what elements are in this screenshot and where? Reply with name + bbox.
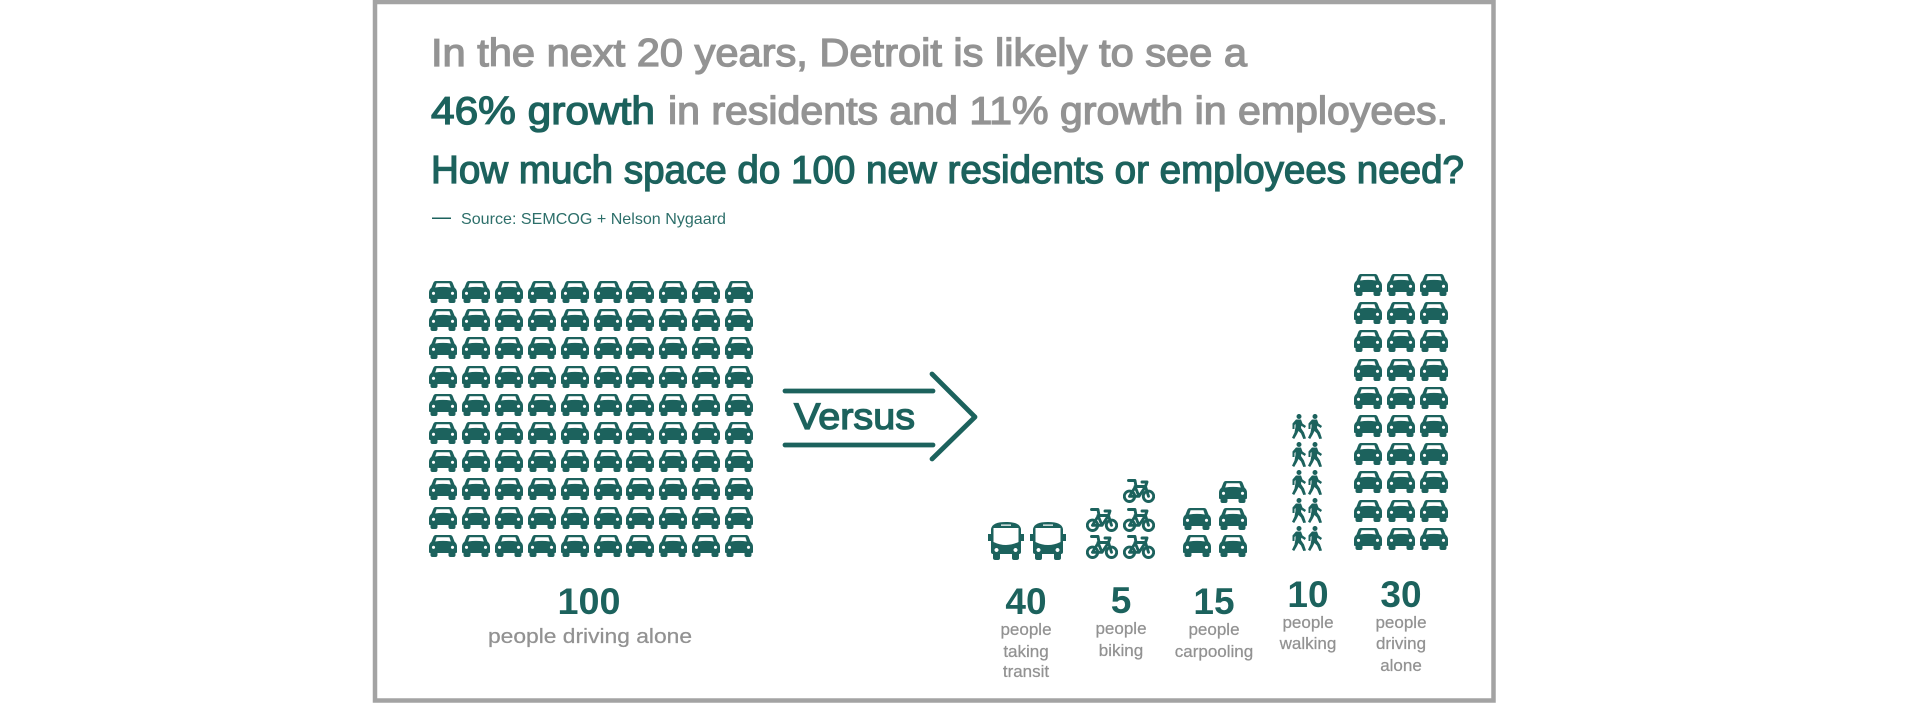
- label: 5 people biking: [1095, 580, 1147, 660]
- source note: Source: SEMCOG + Nelson Nygaard: [461, 211, 726, 228]
- label: 10 people walking: walking: [1279, 634, 1336, 653]
- label: 10 people walking: [1279, 574, 1336, 653]
- icons: solo driver cars: [1354, 274, 1448, 550]
- label: 30 people driving alone: driving: [1376, 634, 1426, 653]
- label: 5 people biking: 5: [1111, 580, 1131, 621]
- label: 15 people carpooling: 15: [1193, 581, 1235, 622]
- label: 5 people biking: people: [1095, 619, 1147, 638]
- label: 100 people driving alone: 100: [558, 581, 620, 622]
- outer frame: [375, 2, 1494, 700]
- icons: bikes: [1087, 480, 1154, 558]
- label: 30 people driving alone: alone: [1380, 656, 1422, 675]
- label: 5 people biking: biking: [1099, 641, 1143, 660]
- label: 15 people carpooling: carpooling: [1175, 642, 1253, 661]
- label: 40 people taking transit: 40: [1005, 581, 1047, 622]
- icons: walkers: [1292, 414, 1322, 551]
- label: 40 people taking transit: taking: [1003, 642, 1049, 661]
- icons: buses: [988, 522, 1066, 560]
- title line 3 question: How much space do 100 new residents or employees need?: [431, 149, 1464, 192]
- label: 15 people carpooling: people: [1188, 620, 1240, 639]
- label: 15 people carpooling: [1175, 581, 1253, 661]
- label: 40 people taking transit: people: [1000, 620, 1052, 639]
- label: 10 people walking: people: [1282, 613, 1334, 632]
- label: 30 people driving alone: [1375, 574, 1427, 675]
- label: 100 people driving alone: people driving alone: [488, 626, 692, 648]
- title line 2 highlight: 46% growth: [431, 90, 655, 133]
- label: 10 people walking: 10: [1287, 574, 1329, 615]
- label: 30 people driving alone: 30: [1380, 574, 1422, 615]
- title line 2 remainder: in residents and 11% growth in employees.: [668, 90, 1448, 133]
- car grid: 100 people driving alone: [429, 281, 753, 557]
- label: 40 people taking transit: [1000, 581, 1052, 681]
- label: 30 people driving alone: people: [1375, 613, 1427, 632]
- icons: carpool cars: [1183, 481, 1247, 557]
- label: 40 people taking transit: transit: [1003, 662, 1049, 681]
- arrow: Versus: Versus: [794, 396, 915, 437]
- arrow: Versus: [785, 374, 975, 459]
- label: 100 people driving alone: [488, 581, 692, 648]
- title line 1: In the next 20 years, Detroit is likely to see a: [431, 32, 1247, 75]
